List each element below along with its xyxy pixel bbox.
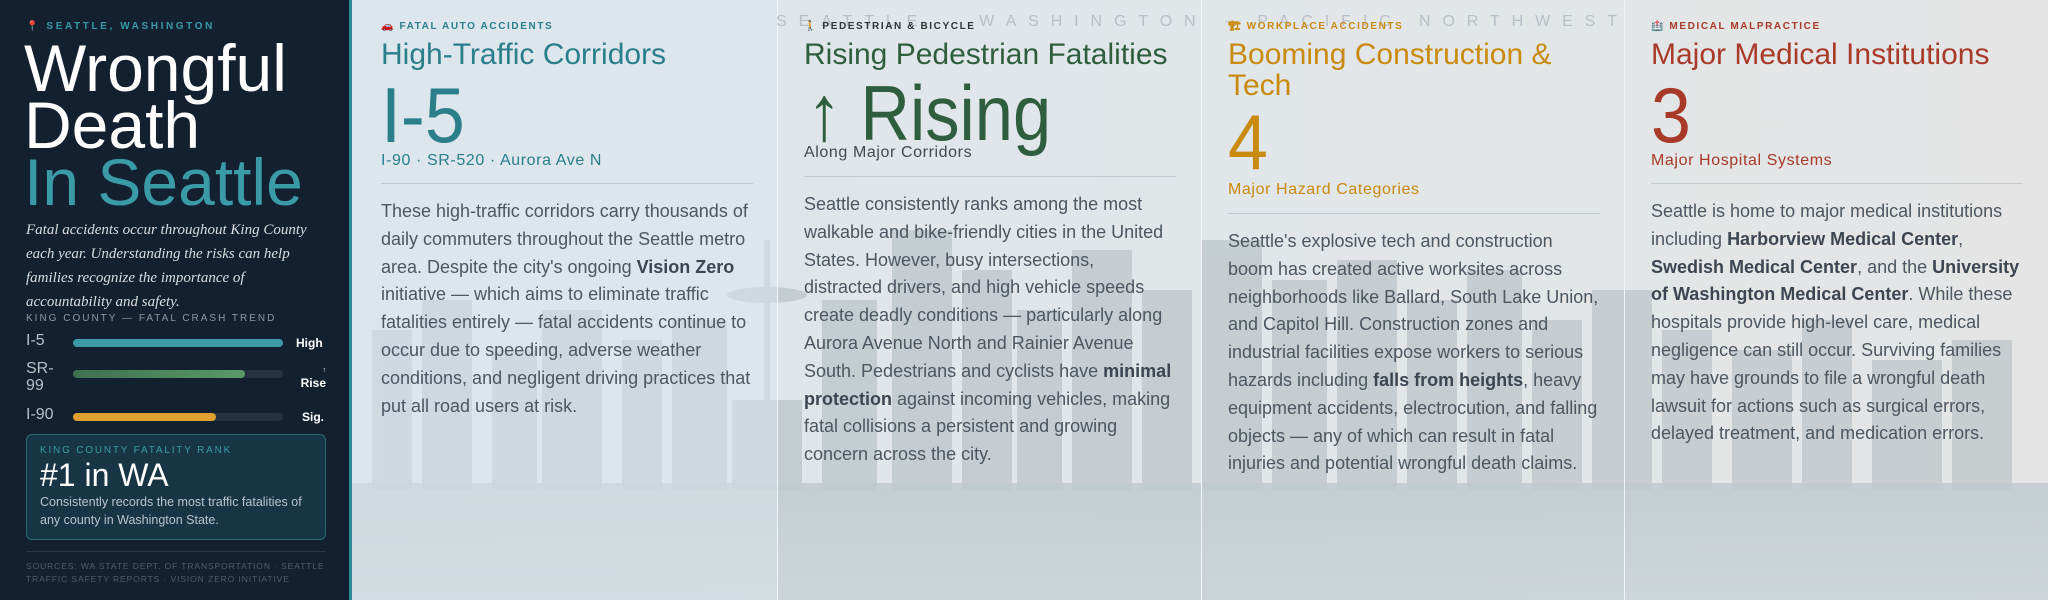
body text: and Capitol Hill. Construction zones and <box>1228 314 1548 334</box>
body text: States. However, busy intersections, <box>804 250 1094 270</box>
bar chart: I-5 <box>26 332 45 349</box>
bar chart: 99 <box>26 377 44 394</box>
body text: South. Pedestrians and cyclists have minimal <box>804 361 1171 381</box>
location label: 📍 SEATTLE, WASHINGTON <box>26 21 215 32</box>
body text: hospitals provide high-level care, medical <box>1651 312 1980 332</box>
body text: including Harborview Medical Center, <box>1651 229 1963 249</box>
bar chart: I-90 <box>26 406 54 423</box>
rank box: KING COUNTY FATALITY RANK <box>40 445 232 456</box>
body text: lawsuit for actions such as surgical errors, <box>1651 396 1985 416</box>
title: In Seattle <box>24 145 303 219</box>
big stat: 4 <box>1228 98 1268 186</box>
sub stat: Major Hazard Categories <box>1228 181 1420 198</box>
body text: hazards including falls from heights, heavy <box>1228 370 1581 390</box>
big stat: I-5 <box>381 71 465 159</box>
heading: Tech <box>1228 69 1291 102</box>
body text: neighborhoods like Ballard, South Lake Union, <box>1228 287 1598 307</box>
body text <box>804 194 1171 464</box>
body text: occur due to speeding, adverse weather <box>381 340 701 360</box>
title: Wrongful <box>24 31 287 105</box>
body text: protection against incoming vehicles, making <box>804 389 1170 409</box>
body text: Seattle's explosive tech and construction <box>1228 231 1553 251</box>
body text: injuries and potential wrongful death claims. <box>1228 453 1577 473</box>
bar chart: Sig. <box>302 410 324 424</box>
body text: initiative — which aims to eliminate traffic <box>381 284 709 304</box>
label: 🏥 MEDICAL MALPRACTICE <box>1651 21 1821 32</box>
sources: SOURCES: WA STATE DEPT. OF TRANSPORTATION · SEATTLE TRAFFIC SAFETY REPORTS · VISION ZERO INITIATIVE <box>26 561 325 584</box>
body text: concern across the city. <box>804 444 992 464</box>
body text: of Washington Medical Center. While these <box>1651 284 2012 304</box>
body text: equipment accidents, electrocution, and falling <box>1228 398 1597 418</box>
rank box <box>26 434 326 540</box>
body text: may have grounds to file a wrongful death <box>1651 368 1985 388</box>
panel: fatal auto accidents <box>381 21 753 416</box>
trend label: KING COUNTY — FATAL CRASH TREND <box>26 313 276 324</box>
body text: Swedish Medical Center, and the University <box>1651 257 2019 277</box>
body text: These high-traffic corridors carry thousands of <box>381 201 748 221</box>
heading: High-Traffic Corridors <box>381 38 666 71</box>
big stat: ↑ Rising <box>807 69 1051 157</box>
title <box>24 31 303 219</box>
body text <box>1651 201 2019 443</box>
sub stat: Along Major Corridors <box>804 144 972 161</box>
body text: area. Despite the city's ongoing Vision Zero <box>381 257 734 277</box>
bar chart: SR- <box>26 360 54 377</box>
bar chart <box>26 332 326 424</box>
big stat: 3 <box>1651 71 1691 159</box>
bar chart: High <box>296 336 323 350</box>
body text: Aurora Avenue North and Rainier Avenue <box>804 333 1134 353</box>
watermark: SEATTLE · WASHINGTON · PACIFIC NORTHWEST <box>776 13 1629 30</box>
rank box: Consistently records the most traffic fatalities of any county in Washington State. <box>40 495 302 527</box>
panel: pedestrian & bicycle <box>804 20 1176 464</box>
heading: Booming Construction & <box>1228 38 1552 71</box>
panel: workplace accidents <box>1228 20 1600 473</box>
sub stat: Major Hospital Systems <box>1651 152 1832 169</box>
heading <box>1228 38 1552 102</box>
body text: boom has created active worksites across <box>1228 259 1562 279</box>
body text: put all road users at risk. <box>381 396 577 416</box>
rank box: #1 in WA <box>40 457 169 493</box>
bar chart: Rise <box>301 376 326 390</box>
body text: fatalities entirely — fatal accidents continue to <box>381 312 746 332</box>
label: 🏗 WORKPLACE ACCIDENTS <box>1228 21 1403 32</box>
panel: medical malpractice <box>1651 20 2023 443</box>
sidebar <box>0 0 352 600</box>
body text: distracted drivers, and high vehicle speeds <box>804 277 1144 297</box>
body text: Seattle is home to major medical institutions <box>1651 201 2002 221</box>
body text: daily commuters throughout the Seattle metro <box>381 229 745 249</box>
body text: industrial facilities expose workers to serious <box>1228 342 1583 362</box>
body text: conditions, and negligent driving practices that <box>381 368 750 388</box>
body text: fatal collisions a persistent and growing <box>804 416 1117 436</box>
intro text: Fatal accidents occur throughout King County each year. Understanding the risks can help families recognize the importance of accountability and safety. <box>26 222 307 310</box>
heading: Rising Pedestrian Fatalities <box>804 38 1168 71</box>
title: Death <box>24 88 200 162</box>
body text: negligence can still occur. Surviving families <box>1651 340 2001 360</box>
label: 🚗 FATAL AUTO ACCIDENTS <box>381 21 553 32</box>
label: 🚶 PEDESTRIAN & BICYCLE <box>804 21 976 32</box>
body text: walkable and bike-friendly cities in the United <box>804 222 1163 242</box>
body text: Seattle consistently ranks among the most <box>804 194 1142 214</box>
bar chart: ↑ <box>322 367 326 374</box>
body text: delayed treatment, and medication errors. <box>1651 423 1984 443</box>
body text: create deadly conditions — particularly along <box>804 305 1162 325</box>
body text: objects — any of which can result in fatal <box>1228 426 1554 446</box>
sub stat: I-90 · SR-520 · Aurora Ave N <box>381 152 602 169</box>
body text <box>1228 231 1598 473</box>
heading: Major Medical Institutions <box>1651 38 1989 71</box>
body text <box>381 201 750 416</box>
